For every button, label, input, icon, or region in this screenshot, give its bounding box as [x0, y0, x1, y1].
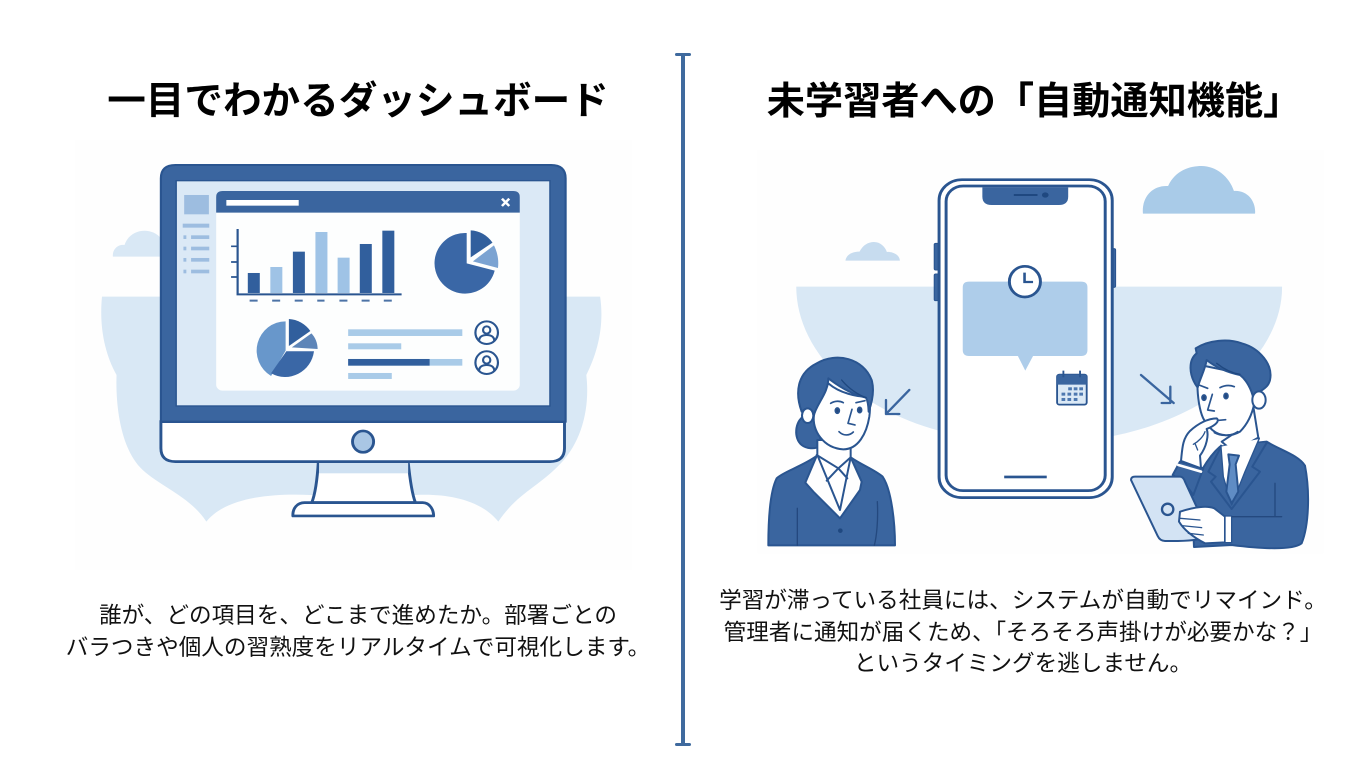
- phone scene: [757, 150, 1324, 553]
- hair highlight: [842, 380, 866, 398]
- pie chart 2: [257, 319, 318, 377]
- shirt: [1221, 438, 1259, 505]
- person: woman: [768, 358, 909, 545]
- fingers: [1180, 518, 1203, 535]
- icon: user 2: [475, 351, 498, 374]
- collar points: [817, 455, 851, 481]
- tablet: [1131, 477, 1210, 541]
- bar chart: [231, 229, 402, 301]
- text block: notification description: というタイミングを逃しません。: [854, 651, 1192, 676]
- icon: calendar: [1057, 371, 1087, 405]
- sidebar: [183, 195, 209, 273]
- message bubble: [963, 282, 1087, 371]
- icon: monitor: [161, 165, 566, 516]
- divider: [675, 53, 691, 746]
- text block: dashboard description: 誰が、どの項目を、どこまで進めたか。部署ごとの: [99, 603, 617, 628]
- person: man: [1131, 341, 1308, 548]
- face details: [1199, 385, 1238, 435]
- jacket seams: [1232, 483, 1282, 517]
- sleeve: [1173, 462, 1203, 495]
- jacket seams: [797, 502, 878, 545]
- text block: dashboard description: バラつきや個人の習熟度をリアルタイムで可視化します。: [66, 634, 650, 660]
- icon: clock: [1009, 266, 1040, 297]
- ear: [802, 408, 813, 423]
- phone body: [939, 180, 1112, 498]
- arrow left: [886, 390, 909, 414]
- pie chart 1: [435, 230, 498, 294]
- cloud large: [1143, 166, 1255, 214]
- monitor bezel: [161, 165, 566, 422]
- heading: dashboard: 一目でわかるダッシュボード: [107, 80, 609, 123]
- face: [1197, 365, 1257, 435]
- tie: [1226, 454, 1239, 503]
- arrow right: [1141, 375, 1174, 403]
- tablet button: [1162, 504, 1173, 515]
- cloud: [113, 231, 161, 257]
- text block: notification description: 管理者に通知が届くため、「そろそろ声掛けが必要かな？」: [724, 620, 1322, 644]
- monitor button: [353, 431, 374, 452]
- button: [838, 528, 843, 533]
- neck: [1222, 407, 1258, 452]
- background blob: [101, 297, 601, 522]
- jacket: [768, 456, 895, 545]
- shirt cuff: [1225, 516, 1232, 543]
- hair highlight: [1217, 363, 1240, 374]
- lapels: [1208, 442, 1267, 509]
- phone screen: [946, 186, 1105, 491]
- phone notch: [982, 187, 1068, 205]
- face: [814, 383, 870, 449]
- text block: dashboard description: [66, 603, 650, 660]
- hair: [1191, 341, 1270, 398]
- panel: notification illustration: [757, 150, 1324, 553]
- background blob: [796, 287, 1282, 443]
- fingers: [1193, 432, 1205, 450]
- heading: notification: 未学習者への「自動通知機能」: [767, 80, 1301, 123]
- text block: notification description: [719, 588, 1327, 676]
- list bars: [348, 329, 462, 379]
- cuff: [1178, 465, 1201, 472]
- side buttons: [934, 243, 1116, 301]
- hair: [798, 358, 873, 417]
- icon: phone: [934, 180, 1116, 498]
- raised hand: [1181, 418, 1218, 468]
- monitor body: [161, 422, 564, 462]
- collar and shirt: [817, 440, 851, 510]
- text block: notification description: 学習が滞っている社員には、システムが自動でリマインド。: [719, 588, 1327, 613]
- face details: [831, 401, 865, 435]
- icon: user 1: [475, 321, 498, 344]
- panel: dashboard illustration: [75, 140, 632, 570]
- cloud small: [845, 242, 900, 261]
- home bar: [1004, 476, 1047, 478]
- window: [216, 191, 520, 391]
- hair bun: [796, 417, 822, 448]
- monitor stand: [293, 462, 434, 516]
- screen: [176, 181, 550, 406]
- jacket: [1192, 442, 1308, 548]
- ear: [1252, 391, 1266, 409]
- holding hand: [1179, 507, 1225, 543]
